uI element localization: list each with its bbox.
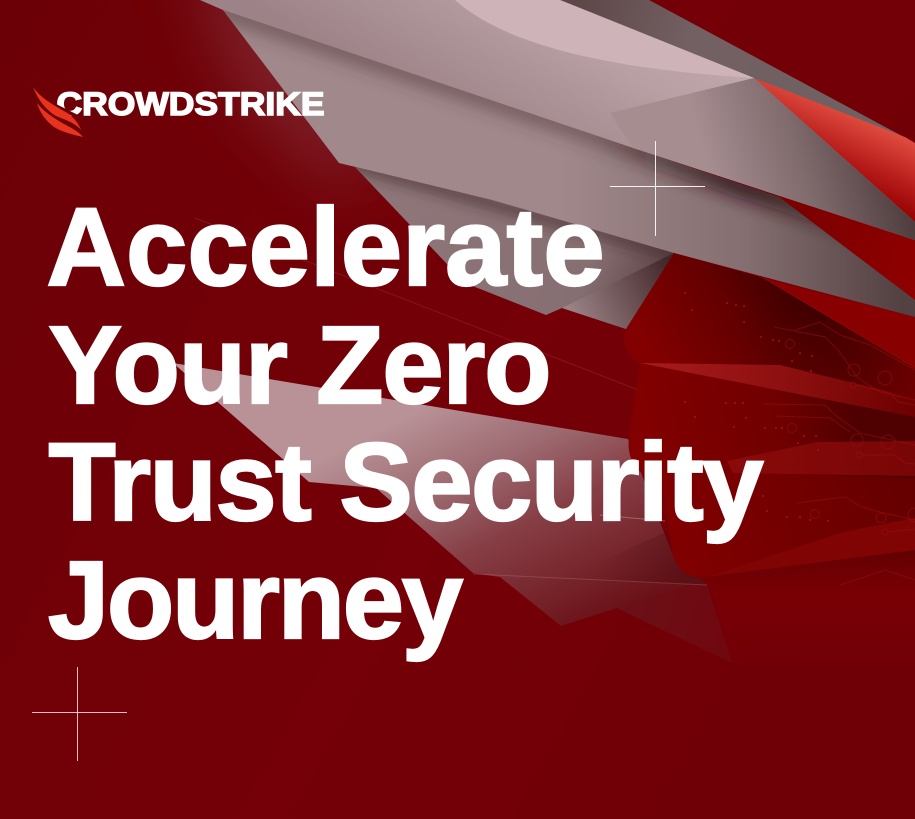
logo: CrowdStrike [33, 86, 324, 137]
icon: falcon [33, 87, 83, 137]
top fold [200, 0, 915, 240]
title: Trust Security [48, 421, 764, 544]
red triangle [754, 78, 915, 222]
red panel D [707, 550, 915, 663]
haze beside fabric [190, 0, 380, 185]
lower light fabric fold [173, 363, 732, 663]
circuit dots [684, 292, 829, 522]
red panel A [624, 253, 915, 418]
under fold [355, 167, 674, 329]
red panel C [660, 472, 915, 577]
title: Your Zero [48, 304, 552, 427]
upper grey fabric [200, 0, 915, 329]
decorative cross: upper [610, 141, 705, 236]
circuit traces [763, 322, 915, 585]
middle fold [223, 10, 915, 317]
red panel B [629, 363, 915, 478]
light patch [455, 0, 754, 78]
title: Accelerate [46, 186, 604, 309]
thin diagonal line [195, 218, 636, 389]
back dark strip [560, 0, 915, 143]
decorative cross: lower [32, 667, 127, 761]
title: Journey [48, 539, 463, 662]
notch in C [50, 103, 76, 116]
red band between folds [770, 190, 915, 300]
title [46, 186, 764, 662]
logo wordmark: CROWDSTRIKE [56, 86, 324, 122]
